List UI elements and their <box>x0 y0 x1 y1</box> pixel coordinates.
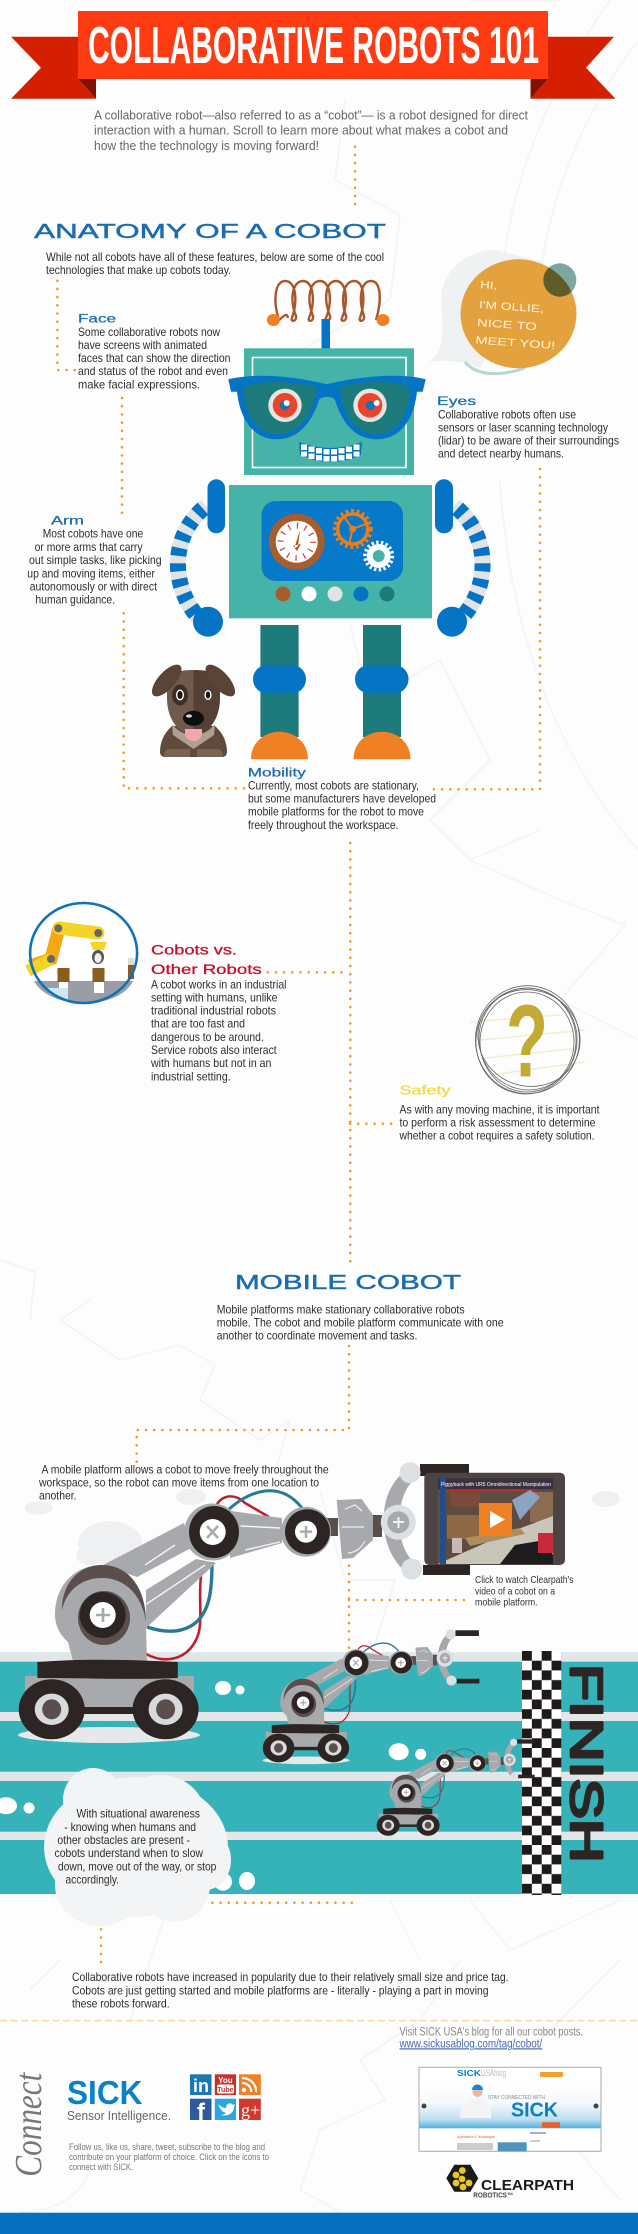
heading: eyes: Eyes <box>437 396 476 408</box>
situational awareness cloud: down, move out of the way, or stop <box>58 1859 217 1873</box>
large cobot on mobile platform <box>18 1462 470 1743</box>
situational awareness cloud: cobots understand when to slow <box>54 1846 203 1860</box>
eyes text: and detect nearby humans. <box>438 447 564 461</box>
mobile platform text: A mobile platform allows a cobot to move freely throughout the <box>42 1462 329 1476</box>
heading: mobile cobot: MOBILE COBOT <box>235 1272 461 1294</box>
intro text <box>94 108 528 153</box>
intro text: how the the technology is moving forward! <box>94 138 319 153</box>
robot head <box>244 348 414 475</box>
finish line checker <box>522 1651 561 1895</box>
face text: Some collaborative robots now <box>78 325 220 339</box>
anatomy intro text <box>46 250 384 277</box>
safety text: As with any moving machine, it is important <box>400 1102 600 1116</box>
mobile cobot text: mobile. The cobot and mobile platform communicate with one <box>217 1315 504 1329</box>
speech bubble: HI, <box>480 279 498 292</box>
dotted connector: cobots vs other robots <box>268 971 344 974</box>
robot gears <box>334 511 393 570</box>
dotted connector: awareness <box>212 1896 352 1903</box>
blog link text: www.sickusablog.com/tag/cobot/ <box>399 2038 543 2050</box>
video caption <box>475 1574 574 1608</box>
icon: question mark: ? <box>506 984 548 1098</box>
follow text: connect with SICK. <box>69 2162 133 2173</box>
video caption: Click to watch Clearpath's <box>475 1574 574 1586</box>
face text: have screens with animated <box>78 338 207 352</box>
icon: twitter <box>215 2099 236 2120</box>
social icons <box>190 2074 261 2126</box>
safety text: to perform a risk assessment to determine <box>400 1116 596 1130</box>
arm text <box>27 527 162 607</box>
heading: cobots vs other robots: Cobots vs. <box>151 942 237 957</box>
cobots vs other robots text: traditional industrial robots <box>151 1004 276 1018</box>
mobile platform text: workspace, so the robot can move items from one location to <box>38 1475 319 1489</box>
icon: youtube <box>215 2074 236 2095</box>
logo: SICK: SICK <box>67 2074 143 2111</box>
arm text: autonomously or with direct <box>30 580 158 594</box>
white dust clouds <box>0 1681 426 1891</box>
mobile cobot text: another to coordinate movement and tasks. <box>217 1328 417 1342</box>
logo: clearpath: CLEARPATH <box>481 2177 574 2194</box>
mobility text: freely throughout the workspace. <box>248 818 398 832</box>
connect label: Connect <box>8 2072 50 2177</box>
cobots vs other robots text: with humans but not in an <box>150 1056 271 1070</box>
icon: youtube: You <box>218 2076 233 2085</box>
cobots vs other robots text <box>150 978 286 1083</box>
arm text: up and moving items, either <box>27 566 155 580</box>
heading: cobots vs other robots: Other Robots <box>151 962 262 977</box>
dotted connector: conclusion <box>100 1929 102 1968</box>
video tablet: Piggyback with UR5 Omnidirectional Manipulation <box>441 1482 551 1488</box>
intro text: A collaborative robot—also referred to as a “cobot”— is a robot designed for direct <box>94 108 528 122</box>
conclusion text <box>72 1970 508 2010</box>
blog link text: Visit SICK USA's blog for all our cobot posts. <box>400 2026 583 2038</box>
situational awareness cloud <box>44 1768 231 1926</box>
situational awareness cloud: accordingly. <box>66 1872 119 1886</box>
blog screenshot: STAY CONNECTED WITH <box>488 2095 545 2101</box>
heading: safety: Safety <box>400 1084 452 1098</box>
video tablet <box>424 1473 565 1565</box>
blog screenshot: USAblog <box>481 2068 506 2078</box>
face text <box>78 325 230 391</box>
robot gauge <box>269 514 325 570</box>
logo: SICK <box>67 2074 171 2123</box>
footer dashed divider <box>0 2020 638 2022</box>
speech bubble: MEET YOU! <box>475 335 556 352</box>
blog screenshot <box>419 2067 601 2151</box>
cobots vs other robots text: that are too fast and <box>151 1017 245 1031</box>
face text: faces that can show the direction <box>78 351 230 365</box>
mobility text: Currently, most cobots are stationary, <box>248 779 419 793</box>
robot teeth <box>299 442 362 462</box>
face text: and status of the robot and even <box>78 364 228 378</box>
arm text: human guidance. <box>35 593 115 607</box>
conclusion text: Cobots are just getting started and mobile platforms are - literally - playing a part in moving <box>72 1983 489 1997</box>
follow text: Follow us, like us, share, tweet, subscribe to the blog and <box>69 2142 265 2153</box>
robot glasses and eyes <box>228 376 426 439</box>
dotted connector: eyes to mobility <box>428 469 540 789</box>
mobile cobot text <box>217 1302 504 1342</box>
mobility text: but some manufacturers have developed <box>248 792 436 806</box>
icon: facebook: f <box>197 2099 206 2126</box>
dotted connector: face to arm <box>121 398 123 515</box>
mobile platform text: another. <box>39 1488 76 1502</box>
robot buttons <box>276 586 394 602</box>
robot body <box>229 485 432 618</box>
situational awareness cloud: other obstacles are present - <box>57 1833 190 1847</box>
anatomy intro text: While not all cobots have all of these features, below are some of the cool <box>46 250 384 264</box>
speech bubble: I'M OLLIE, <box>479 299 544 316</box>
cobots vs other robots text: dangerous to be around. <box>151 1030 264 1044</box>
face text: make facial expressions. <box>78 377 200 391</box>
arm text: or more arms that carry <box>35 540 143 554</box>
dotted connector: video <box>349 1566 467 1648</box>
banner ribbon tails <box>11 37 616 99</box>
cobots vs other robots text: A cobot works in an industrial <box>151 978 286 992</box>
follow text: contribute on your platform of choice. Click on the icons to <box>69 2152 269 2163</box>
icon: linkedin: in <box>193 2076 209 2096</box>
finish label: FINISH <box>561 1664 612 1863</box>
cobots vs other robots text: setting with humans, unlike <box>151 991 278 1005</box>
situational awareness cloud: With situational awareness <box>76 1807 200 1821</box>
mobile platform text <box>38 1462 329 1502</box>
heading: anatomy of a cobot: ANATOMY OF A COBOT <box>34 221 386 243</box>
dotted connector: centre line <box>349 843 352 1267</box>
eyes text: Collaborative robots often use <box>438 407 576 421</box>
icon: industrial robots circle <box>28 903 137 1003</box>
arm text: out simple tasks, like picking <box>29 553 162 567</box>
intro text: interaction with a human. Scroll to learn more about what makes a cobot and <box>94 123 508 138</box>
logo: clearpath <box>446 2165 574 2199</box>
icon: question mark <box>464 975 594 1101</box>
conclusion text: these robots forward. <box>72 1996 170 2010</box>
small cobot rear lane <box>376 1739 535 1837</box>
icon: rss <box>239 2074 261 2095</box>
robot arms <box>178 479 483 637</box>
video caption: video of a cobot on a <box>475 1585 555 1597</box>
follow text <box>69 2142 269 2173</box>
mobility text <box>248 779 436 832</box>
dotted connector: mobile cobot to platform text <box>137 1346 349 1462</box>
icon: robot <box>178 281 483 759</box>
heading: arm: Arm <box>51 515 84 527</box>
dotted connector: face <box>57 281 76 370</box>
heading: mobility: Mobility <box>248 768 306 780</box>
footer bar <box>0 2213 638 2234</box>
dotted connector: intro to anatomy <box>354 147 356 212</box>
blog link text <box>399 2026 583 2050</box>
mobility text: mobile platforms for the robot to move <box>248 805 424 819</box>
logo: clearpath: ROBOTICS™ <box>473 2192 513 2199</box>
robot antenna <box>267 281 390 349</box>
conclusion text: Collaborative robots have increased in popularity due to their relatively small size and price tag. <box>72 1970 508 1984</box>
situational awareness cloud: - knowing when humans and <box>64 1820 196 1834</box>
blog screenshot: Applications & Technologies <box>457 2134 495 2139</box>
icon: google plus: g+ <box>241 2100 260 2120</box>
safety text <box>399 1102 600 1143</box>
icon: dog <box>147 660 240 757</box>
safety text: whether a cobot requires a safety solution. <box>399 1129 594 1143</box>
heading: cobots vs other robots <box>151 942 262 977</box>
anatomy intro text: technologies that make up cobots today. <box>46 263 231 277</box>
eyes text: sensors or laser scanning technology <box>438 421 608 435</box>
track: teal and grey stripes <box>0 1653 638 1894</box>
speech bubble: NICE TO <box>477 317 537 333</box>
robot legs <box>251 625 410 759</box>
heading: face: Face <box>78 314 116 326</box>
cobots vs other robots text: industrial setting. <box>151 1069 231 1083</box>
speech bubble <box>429 250 576 374</box>
eyes text <box>438 407 619 461</box>
icon: youtube: Tube <box>217 2087 234 2094</box>
blog screenshot: SICK <box>511 2100 559 2122</box>
play button <box>479 1503 512 1536</box>
mobile cobot text: Mobile platforms make stationary collaborative robots <box>217 1302 465 1316</box>
small cobot middle lane <box>262 1629 479 1764</box>
arm text: Most cobots have one <box>43 527 143 541</box>
logo: SICK: Sensor Intelligence. <box>67 2108 171 2123</box>
cobots vs other robots text: Service robots also interact <box>151 1043 277 1057</box>
dotted connector: safety <box>350 1122 395 1125</box>
blog screenshot: SICK <box>457 2068 482 2078</box>
dotted connector: arm to mobility <box>124 613 244 788</box>
video caption: mobile platform. <box>475 1596 538 1608</box>
background clouds <box>25 1489 620 1565</box>
